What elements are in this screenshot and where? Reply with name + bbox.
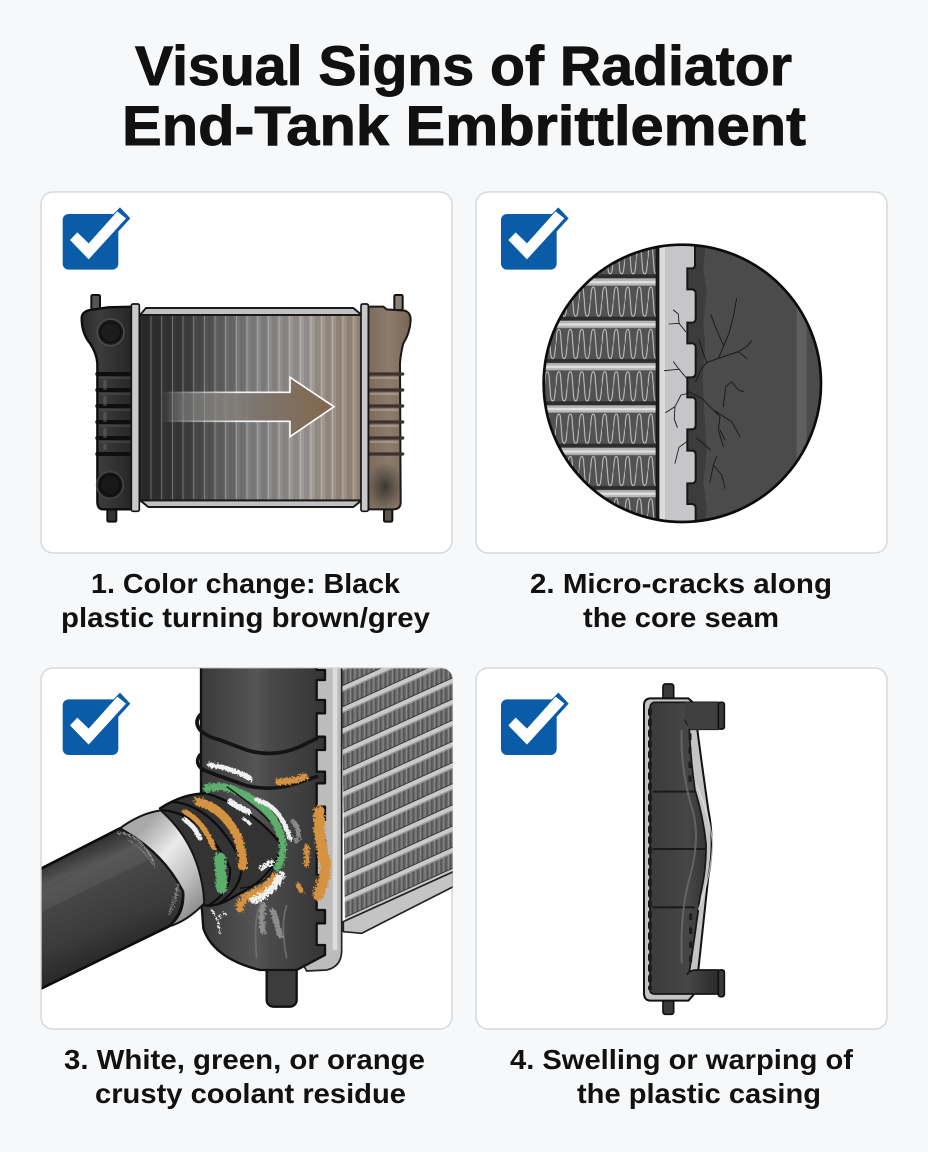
panel 1: color change (41, 192, 452, 553)
black end tank (82, 307, 132, 509)
illustration: magnified crack seam (542, 243, 827, 523)
residue: orange (185, 777, 325, 908)
title (122, 34, 806, 157)
residue: faint grey speckle (118, 822, 299, 935)
caption 4: 4. Swelling or warping of (510, 1044, 854, 1075)
panel 2: micro-cracks (476, 192, 887, 553)
caption 2: 2. Micro-cracks along (530, 568, 832, 599)
hose (38, 828, 183, 990)
caption 4 (510, 1044, 854, 1109)
caption 2 (530, 568, 832, 633)
radiator core slats (342, 667, 453, 933)
neck (160, 793, 282, 906)
brown end tank (367, 307, 411, 512)
arrow: colour progression (162, 377, 334, 437)
residue: green (207, 787, 283, 888)
illustration: warped plastic tank (644, 684, 724, 1014)
title: Visual Signs of Radiator (135, 34, 792, 97)
illustration: hose joint with crusty residue (38, 667, 453, 1007)
panel 4: swelling (476, 668, 887, 1029)
caption 3 (64, 1044, 425, 1109)
caption 2: the core seam (583, 602, 779, 633)
icon: checkbox 4 (501, 693, 569, 755)
title: End-Tank Embrittlement (122, 94, 806, 157)
side plates (131, 304, 368, 511)
caption 3: crusty coolant residue (95, 1078, 406, 1109)
illustration: radiator fading from black to brown (82, 295, 411, 522)
hose clamp (120, 810, 204, 927)
icon: checkbox 1 (63, 207, 130, 270)
caption 4: the plastic casing (577, 1078, 821, 1109)
residue: white crust (185, 765, 290, 933)
icon: checkbox 3 (63, 693, 130, 755)
side plate (303, 667, 342, 971)
end tank (197, 667, 325, 970)
radiator core (140, 308, 362, 507)
panel 3: coolant residue (38, 667, 453, 1029)
caption 1: 1. Color change: Black (91, 568, 400, 599)
caption 1 (61, 568, 430, 633)
caption 3: 3. White, green, or orange (64, 1044, 425, 1075)
icon: checkbox 2 (501, 207, 569, 270)
caption 1: plastic turning brown/grey (61, 602, 430, 633)
cracks (664, 298, 752, 488)
